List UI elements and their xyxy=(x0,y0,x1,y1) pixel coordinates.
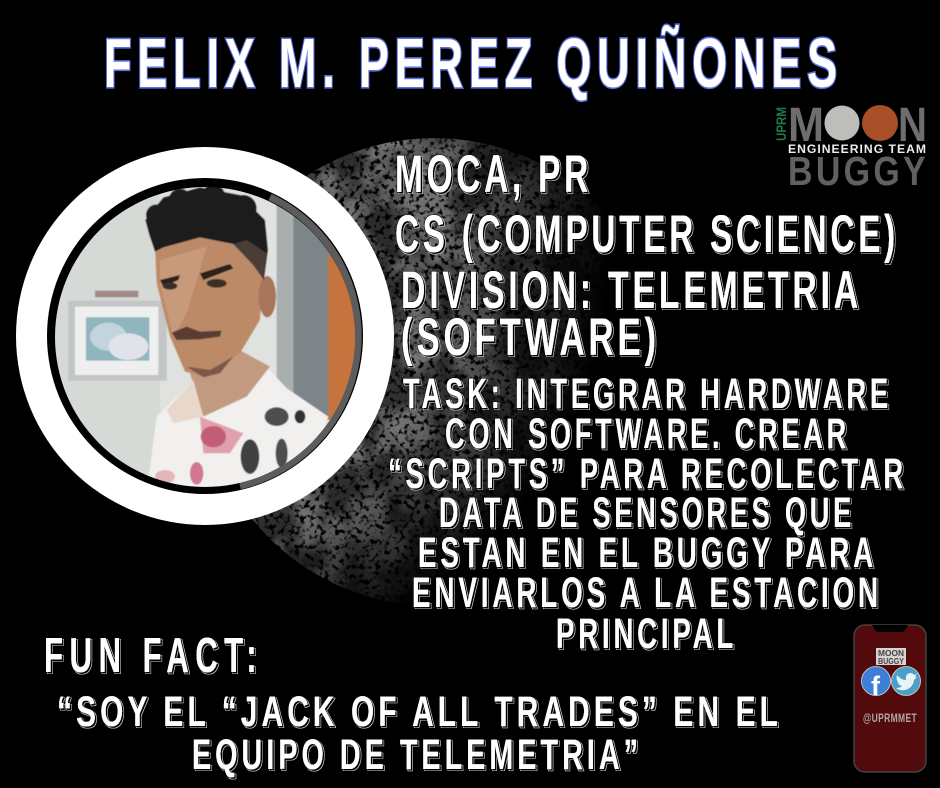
black ring xyxy=(47,178,363,494)
icon: twitter xyxy=(892,666,920,696)
logo UPRM: UPRM xyxy=(773,107,789,141)
icon: facebook xyxy=(862,666,890,701)
white ring xyxy=(16,147,394,525)
mini logo: MOON xyxy=(878,649,904,658)
phone social card xyxy=(854,625,926,772)
mini logo: BUGGY xyxy=(878,657,905,666)
fun fact heading: FUN FACT: xyxy=(44,629,263,683)
logo N: N xyxy=(898,99,927,152)
phone body xyxy=(854,625,926,772)
phone notch xyxy=(872,625,908,632)
handle: @UPRMMET xyxy=(863,711,917,725)
icon: facebook: f xyxy=(871,671,881,701)
logo moon xyxy=(824,106,860,140)
moon xyxy=(252,138,596,602)
profile portrait xyxy=(16,147,394,525)
logo mars xyxy=(862,105,898,141)
logo subtitle: ENGINEERING TEAM xyxy=(788,142,927,156)
moon-textured ring edge xyxy=(240,197,358,486)
fun fact line 2: EQUIPO DE TELEMETRIA” xyxy=(192,731,642,779)
task line 7: PRINCIPAL xyxy=(556,610,737,658)
mini logo xyxy=(876,648,906,666)
logo M: M xyxy=(788,99,824,152)
division line 2: (SOFTWARE) xyxy=(401,308,660,367)
hometown: MOCA, PR xyxy=(395,145,592,204)
photo xyxy=(53,183,367,493)
logo: moon buggy engineering team xyxy=(773,99,929,194)
details text xyxy=(44,145,907,779)
